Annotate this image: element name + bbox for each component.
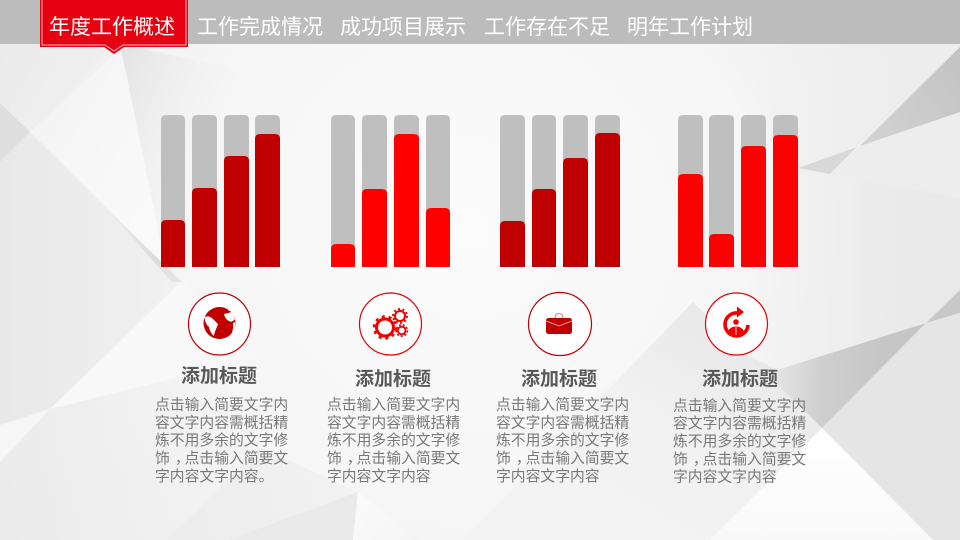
body text: 容文字内容需概括精 [155, 414, 288, 431]
panel 1 [155, 115, 288, 485]
body text: 字内容文字内容 [496, 468, 600, 485]
body text: 容文字内容需概括精 [673, 415, 806, 432]
icon: refresh with person [706, 293, 768, 355]
active tab: 年度工作概述: 年度工作概述 [49, 16, 175, 39]
body text: 炼不用多余的文字修 [155, 431, 288, 449]
body text: 点击输入简要文字内 [496, 397, 629, 414]
nav item: 明年工作计划: 明年工作计划 [627, 16, 753, 39]
body text: 饰 ，点击输入简要文 [496, 451, 629, 467]
body text: 饰 ，点击输入简要文 [327, 451, 460, 467]
heading: 添加标题 [521, 368, 597, 390]
body text: 饰 ，点击输入简要文 [673, 452, 806, 468]
body text: 炼不用多余的文字修 [673, 432, 806, 450]
bar chart 2 [331, 115, 450, 267]
body text: 字内容文字内容 [673, 469, 777, 486]
panel 2 [327, 115, 460, 485]
bar chart 3 [500, 115, 620, 267]
nav item: 工作存在不足: 工作存在不足 [484, 16, 610, 39]
body text: 点击输入简要文字内 [327, 397, 460, 414]
body text: 饰 ，点击输入简要文 [155, 451, 288, 467]
body text: 容文字内容需概括精 [327, 414, 460, 431]
icon: globe [188, 293, 250, 355]
heading: 添加标题 [355, 368, 431, 390]
icon: briefcase [528, 292, 592, 356]
body text: 点击输入简要文字内 [673, 397, 806, 414]
body text: 容文字内容需概括精 [496, 414, 629, 431]
body text: 炼不用多余的文字修 [496, 431, 629, 449]
bar chart 1 [161, 115, 280, 267]
nav item: 成功项目展示: 成功项目展示 [340, 16, 466, 39]
top navigation bar [0, 0, 960, 44]
panel 4 [673, 115, 806, 486]
body text: 字内容文字内容 [327, 468, 431, 485]
bar chart 4 [678, 115, 798, 267]
body text: 字内容文字内容。 [155, 468, 273, 485]
nav item: 工作完成情况: 工作完成情况 [197, 16, 323, 39]
body text: 点击输入简要文字内 [155, 397, 288, 414]
heading: 添加标题 [181, 365, 257, 387]
active tab: 年度工作概述 [40, 0, 188, 54]
heading: 添加标题 [702, 368, 778, 390]
body text: 炼不用多余的文字修 [327, 431, 460, 449]
icon: gears [360, 293, 422, 355]
panel 3 [496, 115, 629, 485]
